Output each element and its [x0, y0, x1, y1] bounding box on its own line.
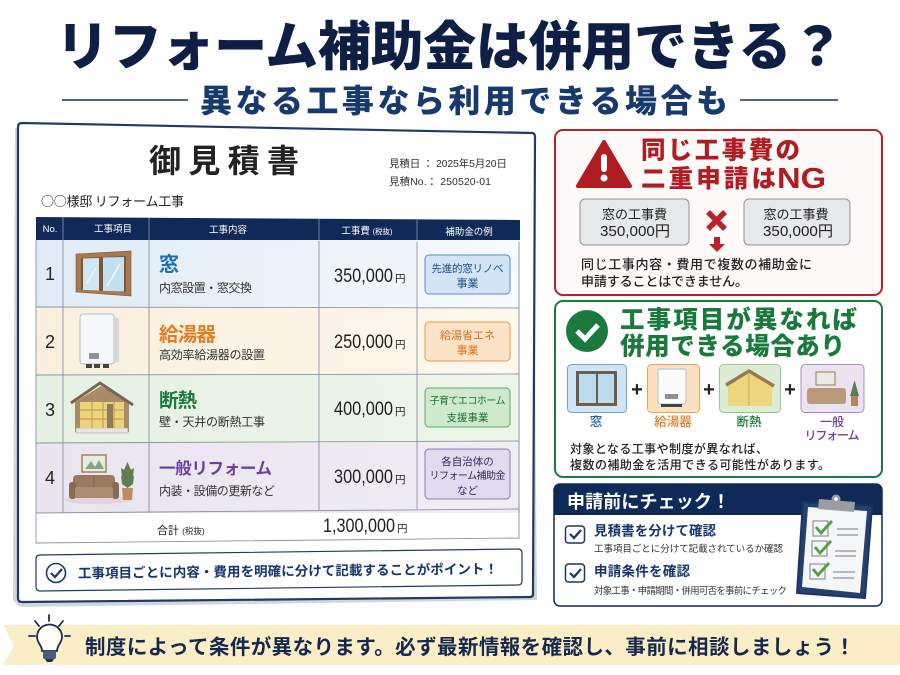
- check item 2: 対象工事・申請期間・併用可否を事前にチェック: [594, 585, 787, 597]
- banner: final reminder: [3, 615, 900, 665]
- icon: insulated house: [71, 383, 133, 433]
- table header: 工事項目: [94, 223, 132, 235]
- panel: combinable: [555, 301, 882, 477]
- row 4: general reform: 300,000: [334, 466, 393, 488]
- NG heading: 二重申請は: [641, 165, 776, 193]
- tile: insulation: 断熱: [736, 415, 762, 429]
- row 2: water heater: 高効率給湯器の設置: [159, 348, 265, 362]
- row 1: window: 1: [45, 264, 55, 284]
- row 4: general reform: 内装・設備の更新など: [159, 484, 275, 498]
- OK heading: [620, 305, 858, 360]
- icon: light bulb: [29, 615, 70, 662]
- banner: final reminder: 制度によって条件が異なります。必ず最新情報を確認し、事前に相談しましょう！: [85, 635, 855, 659]
- row 4: general reform: 4: [45, 468, 55, 488]
- table header: 補助金の例: [445, 226, 493, 238]
- plus: +: [631, 379, 643, 401]
- panel: pre-application checklist: [554, 484, 882, 606]
- total row: 1,300,000: [323, 515, 395, 537]
- row 2: water heater: 250,000: [334, 331, 393, 353]
- row 1: window: 窓: [159, 253, 179, 276]
- panel: estimate sheet: [13, 123, 537, 607]
- title: リフォーム補助金は併用できる？: [56, 18, 844, 77]
- row 3: insulation: 400,000: [334, 398, 393, 420]
- callout: point note: 工事項目ごとに内容・費用を明確に分けて記載することがポイント！: [78, 561, 498, 581]
- NG heading: 同じ工事費の: [641, 136, 800, 164]
- row 2: water heater: [45, 314, 510, 368]
- subsidy tag: 各自治体のリフォーム補助金など: リフォーム補助金: [430, 469, 506, 482]
- tile: general reform: 一般: [820, 415, 844, 429]
- cost box left: [580, 199, 689, 245]
- plus: +: [703, 379, 715, 401]
- icon: living room: [64, 455, 134, 504]
- table: [36, 217, 520, 543]
- tile: window: [568, 364, 626, 429]
- icon: window: [76, 251, 131, 296]
- subsidy tag: 給湯省エネ事業: [425, 322, 510, 361]
- arrow down: [709, 237, 725, 252]
- plus: +: [784, 379, 796, 401]
- cost box right: [744, 199, 850, 245]
- panel: double application NG: [555, 130, 882, 295]
- subtitle with rules: 異なる工事なら利用できる場合も: [200, 83, 728, 119]
- NG explanation: 申請することはできません。: [581, 274, 748, 289]
- NG explanation: 同じ工事内容・費用で複数の補助金に: [581, 257, 812, 272]
- subsidy tag: 子育てエコホーム支援事業: 子育てエコホーム: [430, 394, 506, 407]
- row 4: general reform: [45, 449, 510, 504]
- OK heading: 工事項目が異なれば: [620, 305, 858, 334]
- icon: cross mark: [708, 212, 725, 229]
- icon: warning triangle: [578, 142, 630, 186]
- subsidy tag: 先進的窓リノベ事業: [425, 255, 510, 294]
- tile: window: 窓: [590, 414, 603, 429]
- row 2: water heater: 給湯器: [159, 324, 216, 346]
- icon: clipboard: [797, 494, 872, 598]
- tile: water heater: 給湯器: [654, 414, 692, 429]
- row 3: insulation: 断熱: [159, 390, 197, 412]
- table header: No.: [43, 224, 57, 235]
- customer name: ○○様邸 リフォーム工事: [41, 191, 184, 210]
- estimate heading: 御見積書: [149, 143, 299, 179]
- row 1: window: 350,000: [334, 265, 393, 287]
- estimate meta: [389, 157, 507, 188]
- tile: insulation: [720, 364, 780, 429]
- total row: 合計 (税抜): [157, 523, 205, 537]
- row 2: water heater: 円: [395, 339, 406, 351]
- subsidy tag: 各自治体のリフォーム補助金など: 各自治体の: [441, 455, 494, 468]
- icon: water heater: [80, 314, 119, 368]
- subsidy tag: 給湯省エネ事業: 事業: [456, 344, 478, 357]
- total row: 円: [397, 523, 408, 535]
- tile: general reform: リフォーム: [804, 428, 860, 442]
- checklist header: [554, 484, 882, 515]
- OK explanation: 複数の補助金を活用できる可能性があります。: [570, 457, 830, 472]
- icon: check circle: [566, 310, 608, 352]
- OK explanation: 対象となる工事や制度が異なれば、: [570, 441, 768, 456]
- row 3: insulation: 壁・天井の断熱工事: [159, 415, 265, 429]
- OK heading: 併用できる場合あり: [620, 332, 845, 360]
- row 1: window: 内窓設置・窓交換: [159, 281, 252, 295]
- cost box left: 窓の工事費: [602, 207, 667, 222]
- subsidy tag: 先進的窓リノベ事業: 先進的窓リノベ: [432, 262, 504, 275]
- cost box left: 350,000円: [600, 223, 670, 240]
- row 3: insulation: 円: [395, 406, 406, 418]
- row 3: insulation: [45, 383, 510, 433]
- subsidy tag: 各自治体のリフォーム補助金など: など: [457, 485, 478, 497]
- check item 2: 申請条件を確認: [594, 563, 690, 579]
- NG heading: [641, 136, 826, 195]
- row 4: general reform: 一般リフォーム: [159, 459, 272, 478]
- cost box right: 350,000円: [763, 223, 833, 240]
- table header: 工事内容: [209, 224, 247, 236]
- subsidy tag: 各自治体のリフォーム補助金など: [425, 449, 510, 499]
- NG explanation: [581, 257, 812, 289]
- cost box right: 窓の工事費: [763, 207, 829, 222]
- tile: water heater: [648, 364, 700, 429]
- row 4: general reform: 円: [395, 474, 406, 486]
- check item 1: [566, 522, 783, 555]
- row 2: water heater: 2: [45, 332, 55, 352]
- OK explanation: [570, 441, 830, 472]
- tile: general reform: [801, 364, 864, 442]
- check item 1: 見積書を分けて確認: [594, 522, 716, 538]
- row 1: window: 円: [395, 273, 406, 285]
- table header: [36, 217, 520, 242]
- estimate meta: 見積No.： 250520-01: [389, 175, 491, 188]
- check item 2: [566, 563, 787, 597]
- checklist header: 申請前にチェック！: [567, 492, 730, 512]
- subsidy tag: 子育てエコホーム支援事業: 支援事業: [446, 411, 489, 424]
- row 3: insulation: 3: [45, 400, 55, 420]
- subsidy tag: 給湯省エネ事業: 給湯省エネ: [440, 328, 495, 342]
- estimate meta: 見積日 ： 2025年5月20日: [389, 157, 507, 170]
- total row: [157, 515, 408, 537]
- NG heading: NG: [777, 163, 826, 195]
- subsidy tag: 子育てエコホーム支援事業: [425, 388, 510, 427]
- subsidy tag: 先進的窓リノベ事業: 事業: [456, 277, 478, 290]
- check item 1: 工事項目ごとに分けて記載されているか確認: [594, 543, 783, 555]
- table header: 工事費 (税抜): [341, 225, 393, 237]
- callout: point note: [36, 549, 522, 591]
- row 1: window: [45, 251, 510, 296]
